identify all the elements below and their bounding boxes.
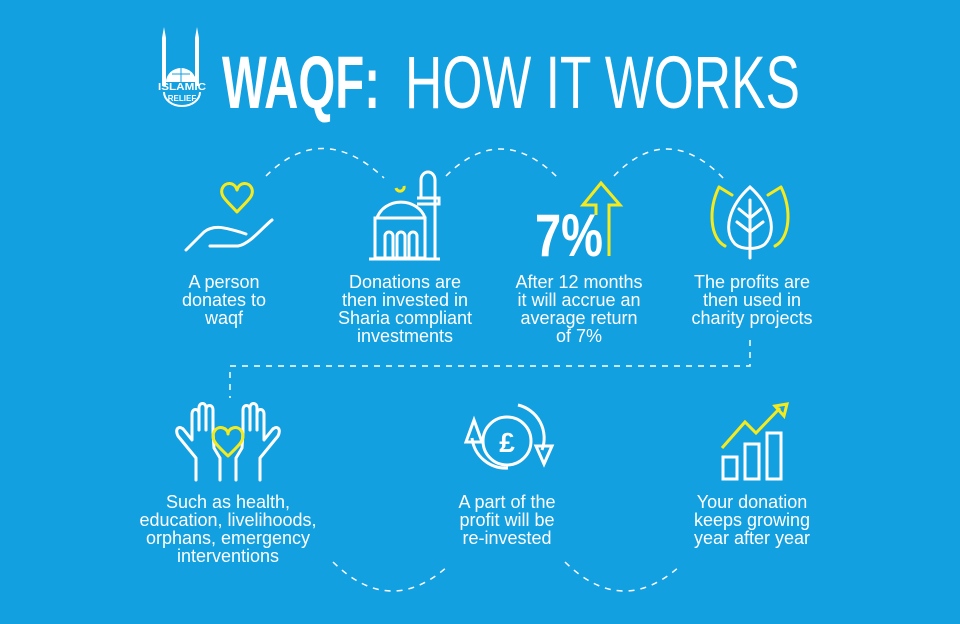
text: step 3: average return <box>520 308 638 328</box>
text: step 2: then invested in <box>342 290 468 310</box>
text: step 3: it will accrue an <box>517 290 641 310</box>
text: step 7: keeps growing <box>694 510 810 530</box>
icon: growth chart <box>722 404 787 479</box>
logo: Islamic Relief <box>158 27 206 106</box>
icon: pound recycle <box>466 405 552 468</box>
text: step 2 <box>338 272 472 346</box>
title: HOW IT WORKS <box>405 41 800 124</box>
text: step 5: interventions <box>177 546 279 566</box>
text: step 4 <box>691 272 813 328</box>
text: step 4: then used in <box>703 290 801 310</box>
text: step 4: charity projects <box>691 308 813 328</box>
text: step 7: year after year <box>694 528 810 548</box>
text: step 1: A person <box>188 272 260 292</box>
icon: pound recycle: £ <box>499 427 515 458</box>
text: step 6: A part of the <box>458 492 556 512</box>
text: step 3: After 12 months <box>515 272 643 292</box>
text: step 1: donates to <box>182 290 266 310</box>
text: step 5 <box>139 492 317 566</box>
icon: hands with heart <box>177 404 279 480</box>
text: step 2: Donations are <box>349 272 461 292</box>
text: step 2: investments <box>357 326 453 346</box>
text: step 1: waqf <box>204 308 244 328</box>
text: step 7 <box>694 492 810 548</box>
icon: mosque <box>369 172 440 259</box>
text: step 4: The profits are <box>694 272 810 292</box>
icon: 7% with arrow: 7% <box>535 202 603 269</box>
text: step 3: of 7% <box>556 326 602 346</box>
icon: leaf <box>712 187 788 258</box>
title: WAQF: <box>222 41 380 124</box>
text: step 5: orphans, emergency <box>146 528 310 548</box>
text: step 1 <box>182 272 266 328</box>
logo: Islamic Relief: ISLAMIC <box>158 82 206 93</box>
dashed arrows <box>230 148 750 591</box>
text: step 2: Sharia compliant <box>338 308 472 328</box>
text: step 5: education, livelihoods, <box>139 510 317 530</box>
text: step 5: Such as health, <box>166 492 290 512</box>
text: step 6: re-invested <box>462 528 552 548</box>
icon: hand with heart <box>186 183 272 250</box>
text: step 7: Your donation <box>697 492 807 512</box>
title <box>222 41 800 124</box>
text: step 3 <box>515 272 643 346</box>
text: step 6: profit will be <box>459 510 555 530</box>
logo: Islamic Relief: RELIEF <box>168 94 196 103</box>
text: step 6 <box>458 492 556 548</box>
